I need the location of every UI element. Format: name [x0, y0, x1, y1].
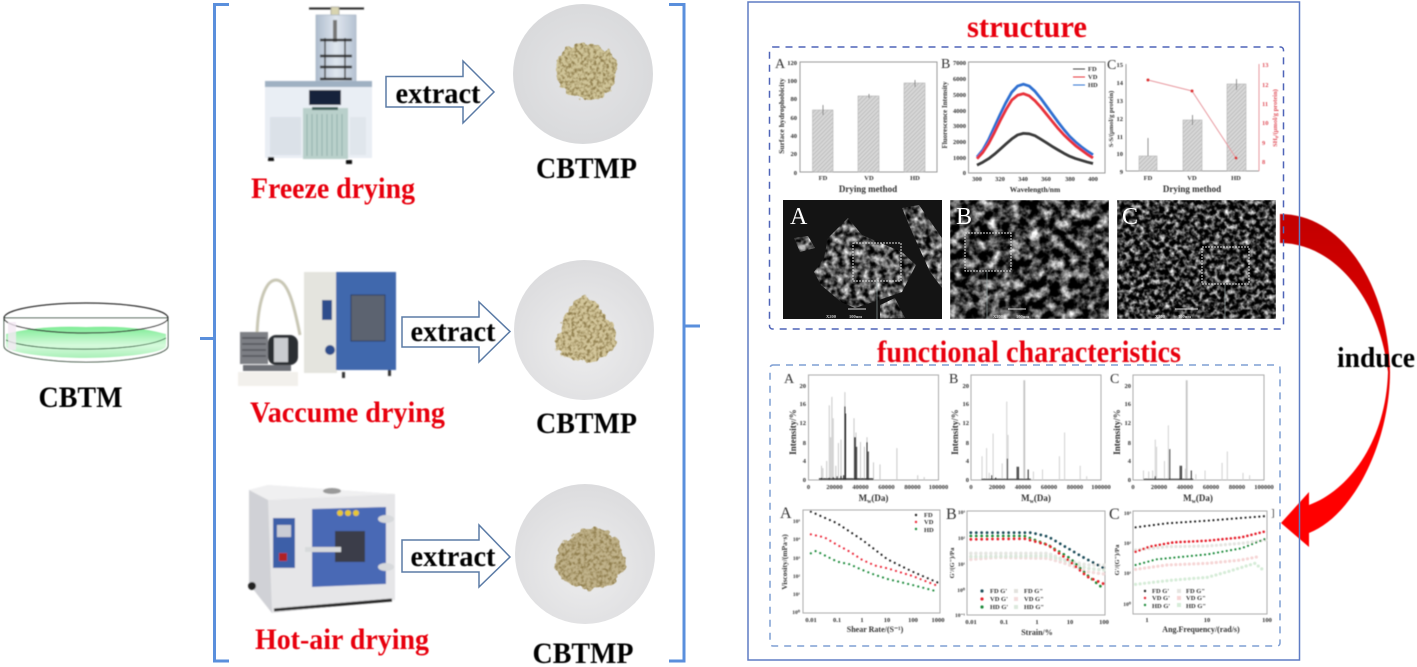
chart: molecular weight spectrum C: 20000 [1151, 484, 1167, 491]
chart: S-S bars and SH line (C) [1107, 58, 1279, 194]
chart: S-S bars and SH line (C): SH₀/(μmol/g protein) [1272, 89, 1279, 147]
chart: G' and G'' vs angular frequency: 1 [1145, 617, 1149, 624]
chart: S-S bars and SH line (C): Drying method [1163, 184, 1221, 194]
chart: viscosity vs shear rate: 10² [793, 574, 800, 580]
chart: molecular weight spectrum C: 80000 [1229, 484, 1245, 491]
chart: G' and G'' vs strain: FD G" [1024, 588, 1043, 595]
chart: viscosity vs shear rate: 10 [884, 617, 890, 624]
chart: molecular weight spectrum C: Intensity/% [1112, 409, 1122, 455]
chart: fluorescence intensity curves (B): 2000 [953, 139, 966, 146]
chart: molecular weight spectrum C: 0 [1128, 477, 1131, 484]
chart: molecular weight spectrum A [784, 372, 948, 505]
chart: molecular weight spectrum C: M [1183, 493, 1192, 503]
chart: G' and G'' vs strain: 10 [1067, 619, 1073, 626]
chart: molecular weight spectrum B: w [1030, 499, 1035, 505]
chart: molecular weight spectrum A: 8 [803, 440, 807, 447]
chart: molecular weight spectrum B: 8 [966, 440, 970, 447]
chart: molecular weight spectrum C: (Da) [1196, 493, 1213, 503]
chart: S-S bars and SH line (C): VD [1187, 175, 1197, 182]
chart: fluorescence intensity curves (B): 0 [963, 170, 966, 177]
chart: surface hydrophobicity bars (A): Surface hydrophobicity [777, 78, 786, 154]
label: CBTM: CBTM [38, 381, 122, 414]
chart: S-S bars and SH line (C): 13 [1116, 98, 1124, 105]
chart: molecular weight spectrum A: A [784, 372, 795, 387]
chart: molecular weight spectrum C: 16 [1124, 401, 1132, 408]
chart: S-S bars and SH line (C): S-S/(μmol/g protein) [1108, 91, 1115, 147]
chart: molecular weight spectrum B: (Da) [1034, 493, 1051, 503]
chart: G' and G'' vs strain: 10⁻¹ [955, 613, 965, 619]
chart: molecular weight spectrum B: 100000 [1091, 484, 1111, 491]
chart: molecular weight spectrum A: w [867, 499, 872, 505]
chart: surface hydrophobicity bars (A): 20 [790, 151, 797, 158]
chart: fluorescence intensity curves (B): 320 [995, 176, 1005, 183]
photo: SEM image B: X200 [993, 314, 1004, 319]
chart: S-S bars and SH line (C): 11 [1262, 101, 1268, 108]
chart: G' and G'' vs angular frequency: C [1109, 506, 1120, 523]
chart: molecular weight spectrum B: M [1021, 493, 1030, 503]
chart: molecular weight spectrum B: 20000 [989, 484, 1005, 491]
photo: SEM image B: B [956, 204, 972, 230]
chart: fluorescence intensity curves (B) [941, 57, 1105, 194]
chart: fluorescence intensity curves (B): 5000 [953, 92, 966, 99]
chart: S-S bars and SH line (C): 12 [1262, 82, 1268, 89]
chart: viscosity vs shear rate: 10⁴ [793, 537, 800, 543]
chart: surface hydrophobicity bars (A): 100 [787, 78, 797, 85]
chart: molecular weight spectrum C: 4 [1128, 458, 1132, 465]
chart: S-S bars and SH line (C): HD [1231, 175, 1241, 182]
chart: G' and G'' vs strain: Strain/% [1021, 628, 1053, 637]
chart: fluorescence intensity curves (B): B [941, 57, 950, 72]
chart: fluorescence intensity curves (B): 360 [1041, 176, 1051, 183]
chart: fluorescence intensity curves (B): HD [1088, 82, 1098, 89]
photo: SEM image C: 100um [1178, 314, 1191, 319]
chart: viscosity vs shear rate: FD [924, 512, 933, 519]
chart: G' and G'' vs strain: 10³ [958, 510, 965, 516]
chart: molecular weight spectrum A: 60000 [878, 484, 895, 491]
chart: fluorescence intensity curves (B): Fluorescence Intensity [941, 81, 949, 148]
icon: petri dish with green CBTM culture [4, 303, 168, 362]
left bracket [200, 4, 229, 661]
photo: powder sample 1 [513, 4, 653, 144]
chart: molecular weight spectrum A: 0 [803, 477, 806, 484]
chart: molecular weight spectrum B [949, 372, 1111, 505]
chart: G' and G'' vs strain: G'/(G")/Pa [949, 547, 956, 578]
chart: S-S bars and SH line (C): 8 [1262, 159, 1266, 166]
photo: SEM image A: 100um [849, 314, 862, 319]
chart: surface hydrophobicity bars (A): 80 [790, 96, 797, 103]
arrow: extract 3: extract [410, 540, 496, 573]
chart: G' and G'' vs angular frequency: FD G' [1152, 588, 1169, 595]
chart: molecular weight spectrum C [1110, 372, 1274, 505]
arrow: extract 1 [386, 61, 494, 123]
chart: viscosity vs shear rate: 10¹ [793, 592, 800, 598]
chart: molecular weight spectrum C: 40000 [1177, 484, 1193, 491]
chart: molecular weight spectrum B: 0 [966, 477, 969, 484]
chart: G' and G'' vs angular frequency: 10³ [1124, 511, 1131, 517]
chart: molecular weight spectrum B: 20 [962, 383, 969, 390]
chart: G' and G'' vs strain: B [946, 506, 957, 523]
chart: surface hydrophobicity bars (A): 40 [790, 133, 797, 140]
chart: G' and G'' vs angular frequency: G'/(G")/Pa [1114, 544, 1121, 575]
chart: fluorescence intensity curves (B): 7000 [953, 60, 966, 67]
arrow: extract 2: extract [410, 315, 496, 348]
photo: SEM image B: 100um [1016, 314, 1029, 319]
icon: freeze dryer [265, 7, 372, 164]
panel: results frame [748, 2, 1300, 660]
chart: molecular weight spectrum C: 12 [1124, 420, 1131, 427]
chart: surface hydrophobicity bars (A): HD [910, 175, 920, 182]
chart: S-S bars and SH line (C): 9 [1262, 140, 1266, 147]
chart: G' and G'' vs angular frequency: 10¹ [1124, 571, 1131, 577]
chart: molecular weight spectrum A: 40000 [852, 484, 869, 491]
chart: molecular weight spectrum A: 20000 [826, 484, 843, 491]
chart: molecular weight spectrum C: 100000 [1254, 484, 1274, 491]
chart: S-S bars and SH line (C): 11 [1117, 134, 1123, 141]
chart: G' and G'' vs strain: HD G' [990, 604, 1008, 611]
chart: molecular weight spectrum B: Intensity/% [950, 409, 960, 455]
chart: G' and G'' vs angular frequency: 10² [1124, 541, 1131, 547]
chart: molecular weight spectrum C: C [1110, 372, 1119, 387]
chart: G' and G'' vs angular frequency: ] [1271, 507, 1275, 519]
chart: surface hydrophobicity bars (A): 60 [790, 115, 797, 122]
chart: surface hydrophobicity bars (A): 0 [794, 170, 797, 177]
chart: G' and G'' vs strain [946, 506, 1109, 637]
photo: SEM image B [950, 200, 1109, 319]
chart: G' and G'' vs strain: 100 [1099, 619, 1109, 626]
photo: SEM image A [783, 200, 942, 319]
chart: viscosity vs shear rate: Shear Rate/(S⁻¹) [847, 625, 904, 634]
arrow: extract 3 [402, 525, 510, 587]
photo: SEM image A: A [790, 204, 808, 230]
chart: viscosity vs shear rate: Viscosity/(mPa·s) [780, 534, 789, 590]
chart: molecular weight spectrum C: w [1192, 499, 1197, 505]
right bracket [669, 4, 700, 661]
chart: fluorescence intensity curves (B): 380 [1065, 176, 1075, 183]
chart: G' and G'' vs strain: HD G" [1024, 604, 1044, 611]
chart: fluorescence intensity curves (B): Wavelength/nm [1010, 185, 1061, 194]
chart: surface hydrophobicity bars (A): A [775, 57, 786, 72]
chart: molecular weight spectrum C: 20 [1124, 383, 1131, 390]
chart: molecular weight spectrum C: 0 [1131, 484, 1135, 491]
label: Vaccume drying: Vaccume drying [250, 396, 445, 429]
chart: S-S bars and SH line (C): FD [1144, 175, 1153, 182]
photo: SEM image C: X200 [1155, 314, 1166, 319]
panel: structure dashed box [770, 47, 1284, 329]
photo: SEM image A: X200 [826, 314, 837, 319]
chart: G' and G'' vs strain: 0.1 [1000, 619, 1008, 626]
chart: G' and G'' vs angular frequency: HD G' [1152, 603, 1170, 610]
chart: S-S bars and SH line (C): 10 [1262, 120, 1268, 127]
chart: G' and G'' vs angular frequency [1109, 506, 1275, 634]
arrow: extract 1: extract [396, 77, 480, 110]
chart: fluorescence intensity curves (B): 3000 [953, 123, 966, 130]
chart: S-S bars and SH line (C): 12 [1116, 116, 1123, 123]
chart: molecular weight spectrum C: 60000 [1203, 484, 1219, 491]
arrow: induce, red curved arrow [1280, 214, 1390, 547]
chart: fluorescence intensity curves (B): 400 [1088, 176, 1098, 183]
chart: molecular weight spectrum A: 100000 [929, 484, 948, 491]
chart: S-S bars and SH line (C): 15 [1116, 62, 1124, 69]
chart: S-S bars and SH line (C): 9 [1120, 169, 1124, 176]
chart: fluorescence intensity curves (B): 6000 [953, 76, 966, 83]
chart: G' and G'' vs angular frequency: VD G" [1186, 595, 1206, 602]
arrow: extract 2 [402, 302, 510, 362]
label: induce: induce [1337, 343, 1415, 374]
photo: powder sample 2 [514, 260, 654, 400]
heading: functional characteristics: functional characteristics [877, 334, 1181, 369]
chart: molecular weight spectrum A: 12 [800, 420, 806, 427]
chart: surface hydrophobicity bars (A) [775, 57, 937, 194]
chart: viscosity vs shear rate: 100 [908, 617, 918, 624]
chart: surface hydrophobicity bars (A): Drying method [839, 184, 897, 194]
label: CBTMP 1: CBTMP [536, 152, 637, 185]
chart: molecular weight spectrum B: 0 [969, 484, 973, 491]
chart: G' and G'' vs strain: 10⁰ [957, 587, 966, 594]
chart: molecular weight spectrum B: 16 [962, 401, 970, 408]
chart: S-S bars and SH line (C): 10 [1116, 151, 1123, 158]
chart: molecular weight spectrum B: 12 [962, 420, 969, 427]
chart: viscosity vs shear rate: HD [924, 527, 934, 534]
chart: S-S bars and SH line (C): 13 [1262, 62, 1269, 69]
chart: molecular weight spectrum C: 8 [1128, 440, 1132, 447]
chart: viscosity vs shear rate: 1000 [932, 617, 944, 624]
chart: surface hydrophobicity bars (A): 120 [787, 60, 797, 67]
chart: S-S bars and SH line (C): 14 [1116, 80, 1124, 87]
panel: functional characteristics dashed box [770, 365, 1280, 646]
chart: molecular weight spectrum A: (Da) [871, 493, 888, 503]
chart: viscosity vs shear rate: A [780, 505, 792, 522]
icon: vacuum oven and pump [238, 272, 396, 386]
chart: fluorescence intensity curves (B): FD [1088, 66, 1097, 73]
chart: S-S bars and SH line (C): C [1107, 58, 1116, 73]
chart: fluorescence intensity curves (B): 340 [1018, 176, 1028, 183]
chart: G' and G'' vs angular frequency: VD G' [1152, 595, 1170, 602]
chart: molecular weight spectrum B: 80000 [1067, 484, 1083, 491]
chart: G' and G'' vs strain: VD G" [1024, 596, 1044, 603]
heading: structure: structure [967, 9, 1087, 44]
label: Freeze drying: Freeze drying [251, 172, 415, 205]
icon: hot-air oven [248, 485, 395, 613]
chart: G' and G'' vs angular frequency: HD G" [1186, 603, 1206, 610]
chart: molecular weight spectrum A: 20 [800, 383, 806, 390]
chart: G' and G'' vs strain: 0.01 [965, 619, 977, 626]
chart: fluorescence intensity curves (B): 4000 [953, 108, 966, 115]
chart: G' and G'' vs angular frequency: 10⁰ [1123, 601, 1132, 608]
chart: surface hydrophobicity bars (A): VD [864, 175, 874, 182]
chart: molecular weight spectrum A: 0 [807, 484, 810, 491]
photo: SEM image C: C [1122, 204, 1138, 230]
chart: G' and G'' vs strain: 1 [1035, 619, 1039, 626]
chart: G' and G'' vs angular frequency: 100 [1262, 617, 1272, 624]
chart: viscosity vs shear rate: 0.1 [833, 617, 841, 624]
chart: viscosity vs shear rate: 0.01 [805, 617, 817, 624]
photo: powder sample 3 [515, 484, 655, 624]
chart: fluorescence intensity curves (B): 1000 [953, 155, 966, 162]
chart: molecular weight spectrum A: 16 [800, 401, 807, 408]
chart: viscosity vs shear rate: 10⁵ [793, 519, 800, 525]
chart: G' and G'' vs strain: 10¹ [958, 562, 965, 568]
photo: SEM image C [1117, 200, 1276, 319]
chart: molecular weight spectrum A: Intensity/% [788, 409, 798, 455]
chart: molecular weight spectrum B: 40000 [1015, 484, 1031, 491]
chart: G' and G'' vs strain: 10² [958, 536, 965, 542]
chart: surface hydrophobicity bars (A): FD [819, 175, 828, 182]
chart: fluorescence intensity curves (B): 300 [972, 176, 982, 183]
chart: G' and G'' vs strain: FD G' [990, 588, 1007, 595]
chart: G' and G'' vs angular frequency: 10 [1204, 617, 1210, 624]
chart: molecular weight spectrum B: 60000 [1041, 484, 1057, 491]
label: CBTMP 2: CBTMP [536, 407, 637, 440]
chart: G' and G'' vs strain: VD G' [990, 596, 1008, 603]
chart: molecular weight spectrum A: 80000 [904, 484, 921, 491]
chart: molecular weight spectrum A: 4 [803, 458, 807, 465]
chart: molecular weight spectrum A: M [859, 493, 867, 503]
chart: molecular weight spectrum B: 4 [966, 458, 970, 465]
chart: viscosity vs shear rate [780, 505, 944, 634]
chart: viscosity vs shear rate: 10⁰ [792, 609, 801, 616]
chart: viscosity vs shear rate: 10³ [793, 556, 800, 562]
chart: molecular weight spectrum B: B [949, 372, 958, 387]
chart: G' and G'' vs angular frequency: FD G" [1186, 588, 1205, 595]
chart: G' and G'' vs angular frequency: Ang.Frequency/(rad/s) [1162, 625, 1240, 634]
label: Hot-air drying: Hot-air drying [255, 623, 429, 656]
chart: viscosity vs shear rate: 1 [860, 617, 864, 624]
chart: fluorescence intensity curves (B): VD [1088, 74, 1098, 81]
chart: viscosity vs shear rate: VD [924, 519, 934, 526]
